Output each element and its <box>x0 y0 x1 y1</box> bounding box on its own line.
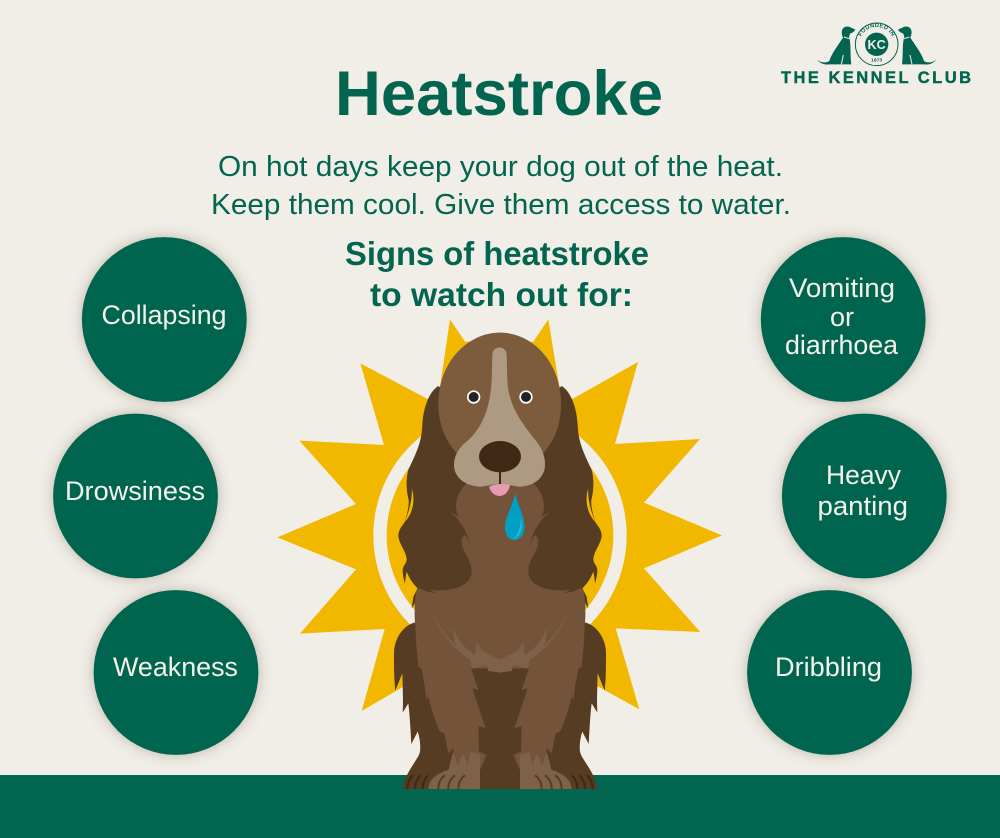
icon: drool drop <box>505 493 524 540</box>
dog nose <box>479 441 521 472</box>
sign: Dribbling <box>747 590 912 755</box>
sign: Vomiting or diarrhoea <box>761 237 926 402</box>
subheading: to watch out for: <box>370 276 633 313</box>
logo dog right <box>898 26 936 64</box>
dog haunches <box>394 587 606 789</box>
dog head <box>438 333 561 457</box>
dog illustration <box>394 333 606 789</box>
logo: The Kennel Club: THE KENNEL CLUB <box>781 69 971 87</box>
dog left eye <box>467 390 480 404</box>
logo: The Kennel Club <box>781 22 971 87</box>
dog chest fur <box>428 608 572 673</box>
sign: Weakness <box>94 590 258 755</box>
intro text: Keep them cool. Give them access to water. <box>211 189 791 221</box>
dog ear wisps <box>405 488 595 522</box>
sign: Weakness: Weakness <box>113 652 238 682</box>
intro text: On hot days keep your dog out of the heat. <box>218 151 783 183</box>
sign: Heavy panting: Heavy <box>826 460 901 490</box>
sign: Heavy panting <box>782 414 947 578</box>
sign: Vomiting or diarrhoea: or <box>830 302 854 332</box>
dog ears <box>398 386 602 593</box>
dog blaze and muzzle <box>454 347 545 487</box>
dog right eye <box>519 390 533 404</box>
sign: Drowsiness <box>53 414 218 578</box>
dog mouth line <box>499 470 501 484</box>
subheading: Signs of heatstroke <box>345 235 649 272</box>
dog body and front legs <box>415 477 585 770</box>
dog toes <box>407 775 593 789</box>
sign: Vomiting or diarrhoea: diarrhoea <box>785 330 899 360</box>
logo roundel: 1873 <box>871 58 882 64</box>
logo roundel: KC <box>868 38 886 52</box>
intro text <box>211 151 791 221</box>
ground band <box>0 775 1000 838</box>
sign: Dribbling: Dribbling <box>775 652 882 682</box>
subheading <box>345 235 649 313</box>
logo dog left <box>817 26 855 64</box>
logo roundel <box>854 22 898 66</box>
sun illustration <box>277 319 722 711</box>
dog tongue <box>489 484 510 496</box>
sign: Vomiting or diarrhoea: Vomiting <box>789 273 895 303</box>
sign: Collapsing: Collapsing <box>102 300 226 330</box>
sign: Collapsing <box>82 237 247 402</box>
dog feet <box>428 752 572 789</box>
logo roundel: FOUNDED IN <box>858 24 895 36</box>
title: Heatstroke <box>335 59 663 129</box>
sign: Drowsiness: Drowsiness <box>65 476 205 506</box>
sign: Heavy panting: panting <box>818 491 908 521</box>
